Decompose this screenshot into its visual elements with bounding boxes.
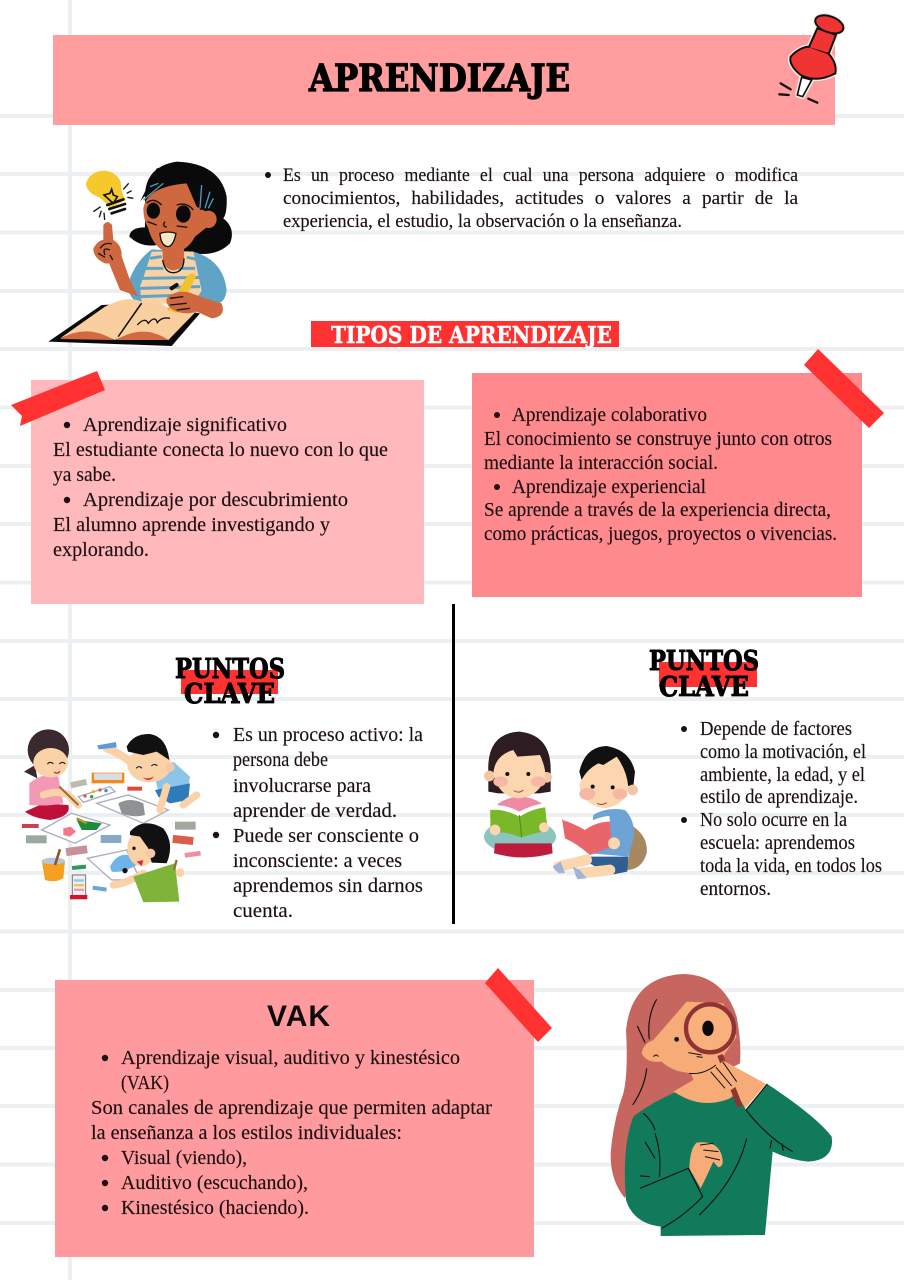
panel: aprendizaje significativo y por descubrimiento: Aprendizaje significativo bbox=[83, 414, 287, 436]
panel: aprendizaje significativo y por descubrimiento bbox=[31, 380, 424, 604]
list: puntos clave izquierda: cuenta. bbox=[233, 900, 293, 922]
tape: right panel bbox=[804, 349, 884, 428]
bucket bbox=[42, 849, 65, 881]
face bbox=[143, 183, 215, 253]
panel: aprendizaje significativo y por descubrimiento: ya sabe. bbox=[53, 464, 116, 486]
list: puntos clave derecha: ambiente, la edad, y el bbox=[700, 765, 866, 786]
heading: puntos clave izquierda: CLAVE bbox=[184, 679, 275, 710]
panel: VAK: Aprendizaje visual, auditivo y kinestésico bbox=[121, 1047, 460, 1069]
writing hand with pencil bbox=[166, 273, 223, 318]
list: puntos clave izquierda: aprendemos sin darnos bbox=[233, 875, 423, 897]
tape: VAK panel bbox=[485, 968, 552, 1042]
panel: aprendizaje colaborativo y experiencial: El conocimiento se construye junto con otros bbox=[484, 429, 832, 450]
heading: VAK: VAK bbox=[267, 1000, 330, 1033]
illustration: student with light bulb and book bbox=[48, 162, 232, 346]
list: puntos clave derecha: Depende de factores bbox=[700, 719, 852, 740]
sweater bbox=[625, 1084, 832, 1236]
heading: puntos clave derecha: CLAVE bbox=[659, 672, 749, 703]
list: puntos clave izquierda: Es un proceso activo: la bbox=[233, 724, 423, 746]
panel: aprendizaje significativo y por descubrimiento: explorando. bbox=[53, 539, 149, 561]
neck bbox=[163, 247, 184, 270]
list: puntos clave derecha: escuela: aprendemos bbox=[700, 833, 855, 854]
panel: aprendizaje colaborativo y experiencial: Aprendizaje colaborativo bbox=[512, 405, 707, 426]
pointing arm bbox=[105, 252, 138, 297]
girl in pink bbox=[24, 729, 78, 820]
panel: VAK: Visual (viendo), bbox=[121, 1147, 247, 1169]
panel: aprendizaje significativo y por descubrimiento: Aprendizaje por descubrimiento bbox=[83, 489, 348, 511]
panel: VAK: Son canales de aprendizaje que permiten adaptar bbox=[91, 1097, 492, 1119]
panel: aprendizaje colaborativo y experiencial: Aprendizaje experiencial bbox=[512, 477, 707, 498]
panel: VAK: (VAK) bbox=[121, 1072, 169, 1094]
girl reading bbox=[484, 732, 556, 857]
intro text block bbox=[265, 166, 798, 232]
illustration: girl with magnifying glass bbox=[611, 974, 832, 1236]
icon: red push pin bbox=[779, 12, 846, 103]
book bbox=[48, 299, 200, 346]
list: puntos clave derecha bbox=[681, 719, 882, 900]
panel: aprendizaje significativo y por descubrimiento: El alumno aprende investigando y bbox=[53, 514, 331, 536]
title: APRENDIZAJE bbox=[308, 56, 570, 100]
panel: aprendizaje colaborativo y experiencial: Se aprende a través de la experiencia directa, bbox=[484, 500, 831, 521]
list: puntos clave derecha: toda la vida, en todos los bbox=[700, 856, 882, 877]
intro text block: conocimientos, habilidades, actitudes o valores a partir de la bbox=[283, 189, 798, 209]
list: puntos clave izquierda: inconsciente: a veces bbox=[233, 850, 402, 872]
icon: light bulb bbox=[86, 171, 133, 220]
abacus bbox=[70, 875, 87, 899]
panel: aprendizaje colaborativo y experiencial: como prácticas, juegos, proyectos o vivencias. bbox=[484, 524, 837, 545]
heading: puntos clave derecha bbox=[649, 646, 759, 703]
list: puntos clave derecha: estilo de aprendizaje. bbox=[700, 787, 858, 808]
list: puntos clave derecha: No solo ocurre en la bbox=[700, 810, 847, 831]
hair bbox=[611, 974, 740, 1198]
list: puntos clave derecha: entornos. bbox=[700, 879, 771, 900]
divider bbox=[452, 604, 455, 924]
boy reading bbox=[553, 746, 647, 879]
panel: VAK: Auditivo (escuchando), bbox=[121, 1172, 308, 1194]
tape: left panel bbox=[11, 371, 105, 426]
list: puntos clave derecha: como la motivación, el bbox=[700, 742, 867, 763]
title banner bbox=[53, 35, 835, 125]
shirt bbox=[127, 249, 227, 304]
boy in green shirt bbox=[113, 823, 184, 902]
intro text block: experiencia, el estudio, la observación o la enseñanza. bbox=[283, 212, 682, 232]
list: puntos clave izquierda: persona debe bbox=[233, 749, 328, 771]
panel: VAK bbox=[55, 980, 534, 1257]
lower hand bbox=[689, 1142, 723, 1188]
hair back bbox=[129, 162, 232, 254]
panel: aprendizaje colaborativo y experiencial bbox=[472, 373, 862, 597]
heading: puntos clave izquierda bbox=[175, 654, 285, 710]
illustration: children reading bbox=[484, 732, 647, 879]
paint details bbox=[63, 827, 76, 837]
illustration: children painting bbox=[22, 729, 201, 902]
list: puntos clave izquierda: involucrarse para bbox=[233, 775, 371, 797]
neck and face bbox=[673, 1060, 766, 1109]
panel: aprendizaje colaborativo y experiencial: mediante la interacción social. bbox=[484, 453, 718, 474]
heading: tipos de aprendizaje: TIPOS DE APRENDIZAJE bbox=[331, 322, 612, 349]
heading: puntos clave izquierda: PUNTOS bbox=[175, 654, 285, 685]
list: puntos clave izquierda bbox=[213, 724, 423, 922]
hand holding handle bbox=[711, 1061, 766, 1097]
list: puntos clave izquierda: aprender de verdad. bbox=[233, 800, 397, 822]
panel: VAK: Kinestésico (haciendo). bbox=[121, 1197, 309, 1219]
boy in blue shirt bbox=[97, 734, 197, 810]
paint tubes bbox=[22, 773, 201, 892]
list: puntos clave izquierda: Puede ser consciente o bbox=[233, 825, 419, 847]
magnifying glass bbox=[686, 1004, 740, 1107]
heading: puntos clave derecha: PUNTOS bbox=[649, 646, 759, 677]
panel: VAK: la enseñanza a los estilos individuales: bbox=[91, 1122, 402, 1144]
panel: aprendizaje significativo y por descubrimiento: El estudiante conecta lo nuevo con lo que bbox=[53, 439, 388, 461]
intro text block: Es un proceso mediante el cual una persona adquiere o modifica bbox=[283, 166, 798, 186]
papers bbox=[42, 787, 168, 880]
